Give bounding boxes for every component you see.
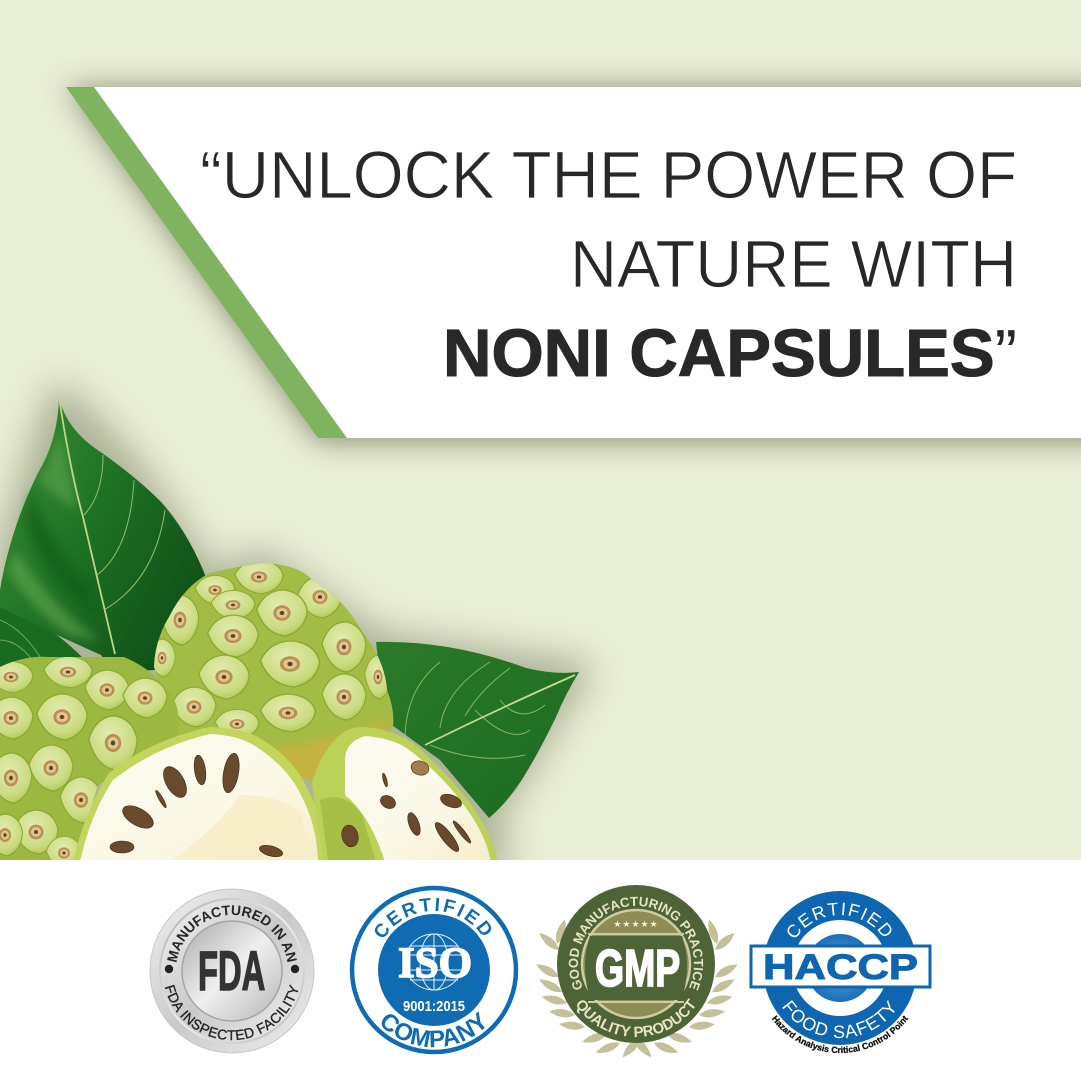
GMP arc text: QUALITY PRODUCT — [576, 998, 695, 1038]
GMP arc text: GOOD MANUFACTURING PRACTICE — [568, 896, 704, 990]
FDA wordmark: FDA — [198, 939, 265, 1002]
HACCP arc text: FOOD SAFETY — [782, 1000, 895, 1038]
GMP wordmark: GMP — [595, 939, 680, 997]
FDA arc text: MANUFACTURED IN AN — [167, 905, 297, 962]
leaf: small left — [0, 607, 82, 667]
FDA arc text — [164, 905, 298, 1040]
fruit: cut half centre — [73, 727, 325, 862]
FDA arc text: FDA INSPECTED FACILITY — [164, 984, 298, 1040]
badge: ISO — [350, 886, 518, 1054]
HACCP wordmark: HACCP — [763, 948, 918, 987]
globe — [405, 934, 463, 990]
bottom white band — [0, 860, 1081, 1081]
HACCP arc text: Hazard Analysis Critical Control Point — [772, 1015, 908, 1054]
headline: NATURE WITH — [570, 227, 1017, 302]
laurel left — [534, 918, 643, 1060]
fruit: left whole noni — [0, 656, 178, 860]
headline: “UNLOCK THE POWER OF — [200, 138, 1017, 213]
plant shadow — [0, 397, 579, 860]
ISO arc text — [374, 898, 492, 1048]
seeds — [339, 759, 473, 854]
ISO arc text: COMPANY — [382, 1011, 485, 1048]
GMP centre band — [585, 936, 687, 1000]
ISO wordmark: ISO — [398, 940, 472, 987]
HACCP arc text: CERTIFIED — [788, 902, 892, 938]
badge: GMP — [536, 885, 738, 1058]
green diagonal stripe — [66, 87, 347, 438]
badge: HACCP — [750, 891, 932, 1054]
badge: FDA — [150, 888, 314, 1054]
GMP stars: ★★★★★ — [613, 920, 659, 930]
background — [0, 0, 1081, 860]
HACCP arc text — [772, 902, 908, 1054]
leaf: right — [376, 642, 579, 818]
fruit: cut half right — [312, 727, 498, 862]
headline — [200, 138, 1017, 391]
headline: NONI CAPSULES” — [443, 316, 1017, 391]
panel shadow — [66, 87, 1081, 442]
noni fruit and leaves illustration — [0, 397, 579, 870]
ISO arc text: CERTIFIED — [374, 898, 492, 938]
fruit: back whole noni — [149, 560, 400, 790]
badge: ISO: 9001:2015 — [403, 998, 465, 1015]
headline panel — [94, 87, 1081, 438]
leaf: large upper — [0, 397, 207, 672]
laurel right — [631, 918, 740, 1060]
seeds — [110, 752, 284, 859]
GMP arc text — [568, 896, 704, 1038]
